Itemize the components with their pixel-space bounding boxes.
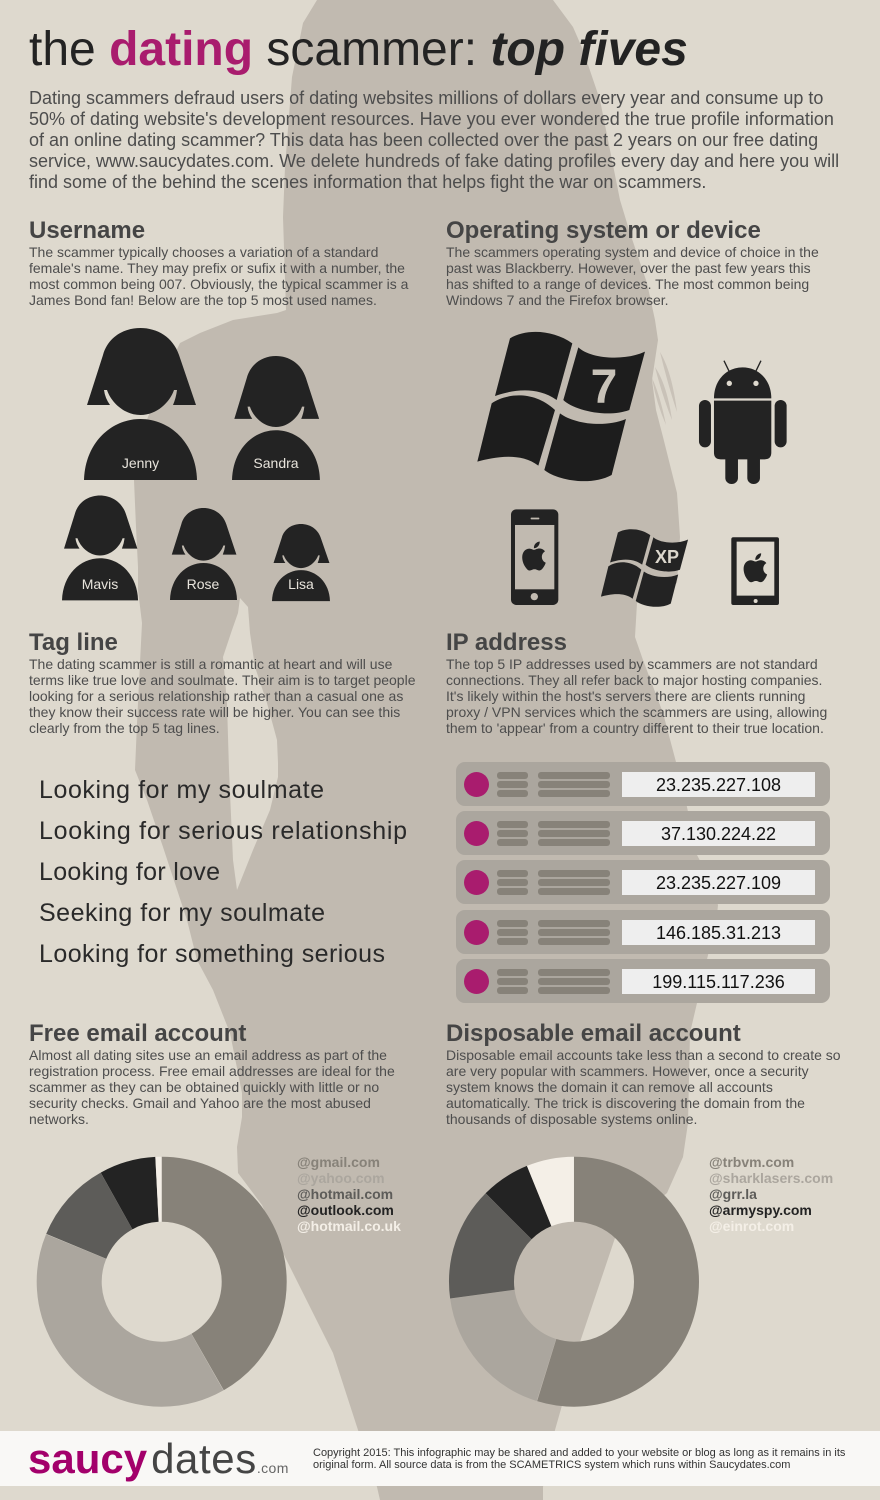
legend: disposable email: @trbvm.com <box>709 1154 794 1170</box>
heading: free email: Free email account <box>29 1020 246 1047</box>
legend: disposable email: @armyspy.com <box>709 1202 812 1218</box>
tag lines: Seeking for my soulmate <box>39 899 325 927</box>
icon: person Lisa <box>272 524 330 601</box>
legend: free email: @hotmail.co.uk <box>297 1218 401 1234</box>
text: ip address: proxy / VPN services which the scammers are using, allowing <box>446 704 827 720</box>
text: tag line: The dating scammer is still a romantic at heart and will use <box>29 656 392 672</box>
intro text: 50% of dating website's development resources. Have you ever wondered the true profile information <box>29 109 834 129</box>
text: ip address: them to 'appear' from a country different to their true location. <box>446 720 824 736</box>
text: ip address: It's likely within the host's servers there are clients running <box>446 688 805 704</box>
panel: free email <box>29 1020 395 1127</box>
panel: username <box>29 217 408 308</box>
icon: iphone <box>511 509 558 605</box>
ip row 1 <box>456 762 830 806</box>
ip row 3 <box>456 860 830 904</box>
tag lines <box>39 776 407 968</box>
text: disposable email: thousands of disposable systems online. <box>446 1111 697 1127</box>
intro text <box>29 88 839 192</box>
icon: windows xp <box>601 529 688 607</box>
title: the dating scammer: top fives <box>29 23 688 76</box>
text: tag line <box>29 656 415 736</box>
text: free email: Almost all dating sites use an email address as part of the <box>29 1047 387 1063</box>
text: tag line: looking for a serious relationship rather than a casual one as <box>29 688 403 704</box>
tag lines: Looking for love <box>39 858 220 886</box>
text: ip address: The top 5 IP addresses used by scammers are not standard <box>446 656 818 672</box>
heading: operating system: Operating system or device <box>446 217 761 244</box>
icon: windows 7 <box>477 332 645 481</box>
ip row 5 <box>456 959 830 1003</box>
text: username <box>29 244 408 308</box>
text: tag line: they know their success rate will be higher. You can see this <box>29 704 400 720</box>
text: operating system: past was Blackberry. However, over the past few years this <box>446 260 811 276</box>
panel: tag line <box>29 629 415 736</box>
heading: tag line: Tag line <box>29 629 118 656</box>
intro text: Dating scammers defraud users of dating websites millions of dollars every year and consume up to <box>29 88 823 108</box>
intro text: of an online dating scammer? This data has been collected over the past 2 years on our free dating <box>29 130 818 150</box>
logo: saucydates.com <box>28 1435 289 1482</box>
text: username: female's name. They may prefix or sufix it with a number, the <box>29 260 405 276</box>
text: free email: networks. <box>29 1111 89 1127</box>
text: username: most common being 007. Obviously, the typical scammer is a <box>29 276 408 292</box>
icon: person Mavis: Mavis <box>82 576 118 592</box>
text: disposable email: system knows the domain it can remove all accounts <box>446 1079 773 1095</box>
panel: operating system <box>446 217 819 308</box>
text: username: The scammer typically chooses a variation of a standard <box>29 244 378 260</box>
legend: free email <box>297 1154 401 1234</box>
text: ip address <box>446 656 827 736</box>
copyright text: original form. All source data is from the SCAMETRICS system which runs within Saucydates.com <box>313 1459 790 1471</box>
donut chart: disposable email <box>443 1151 705 1413</box>
copyright text: Copyright 2015: This infographic may be shared and added to your website or blog as long as it remains in its <box>313 1447 845 1459</box>
heading: ip address: IP address <box>446 629 567 656</box>
intro text: find some of the behind the scenes information that helps fight the war on scammers. <box>29 172 706 192</box>
footer bar <box>0 1431 880 1486</box>
icon: person Sandra: Sandra <box>253 455 299 471</box>
ip row 5: 199.115.117.236 <box>652 972 785 992</box>
icon: person Sandra <box>232 356 320 480</box>
text: username: James Bond fan! Below are the top 5 most used names. <box>29 292 377 308</box>
text: disposable email: Disposable email accounts take less than a second to create so <box>446 1047 841 1063</box>
tag lines: Looking for something serious <box>39 940 385 968</box>
legend: free email: @outlook.com <box>297 1202 394 1218</box>
text: disposable email: are very popular with scammers. However, once a security <box>446 1063 809 1079</box>
ip row 2: 37.130.224.22 <box>661 824 776 844</box>
text: free email <box>29 1047 395 1127</box>
text: tag line: terms like true love and soulmate. Their aim is to target people <box>29 672 415 688</box>
text: disposable email: automatically. The trick is discovering the domain from the <box>446 1095 805 1111</box>
ip row 4: 146.185.31.213 <box>656 923 781 943</box>
legend: disposable email: @grr.la <box>709 1186 757 1202</box>
text: tag line: clearly from the top 5 tag lines. <box>29 720 220 736</box>
text: operating system: has shifted to a range of devices. The most common being <box>446 276 809 292</box>
icon: windows xp: XP <box>655 547 679 567</box>
icon: ipad <box>731 537 779 605</box>
legend: free email: @hotmail.com <box>297 1186 393 1202</box>
ip row 3: 23.235.227.109 <box>656 873 781 893</box>
text: free email: registration process. Free email addresses are ideal for the <box>29 1063 395 1079</box>
ip row 4 <box>456 910 830 954</box>
icon: person Mavis <box>62 496 138 600</box>
ip row 1: 23.235.227.108 <box>656 775 781 795</box>
panel: disposable email <box>446 1020 841 1127</box>
panel: ip address <box>446 629 827 736</box>
tag lines: Looking for serious relationship <box>39 817 407 845</box>
text: disposable email <box>446 1047 841 1127</box>
icon: person Lisa: Lisa <box>288 576 314 592</box>
legend: free email: @gmail.com <box>297 1154 380 1170</box>
legend: disposable email: @sharklasers.com <box>709 1170 833 1186</box>
legend: disposable email: @einrot.com <box>709 1218 794 1234</box>
icon: android <box>699 361 787 484</box>
text: ip address: connections. They all refer back to major hosting companies. <box>446 672 822 688</box>
copyright text <box>313 1447 845 1471</box>
text: operating system: The scammers operating system and device of choice in the <box>446 244 819 260</box>
text: free email: scammer as they can be obtained quickly with little or no <box>29 1079 379 1095</box>
icon: person Rose <box>170 508 237 600</box>
intro text: service, www.saucydates.com. We delete hundreds of fake dating profiles every day and here you will <box>29 151 839 171</box>
ip row 2 <box>456 811 830 855</box>
donut chart: free email <box>36 1156 288 1408</box>
heading: username: Username <box>29 217 145 244</box>
heading: disposable email: Disposable email account <box>446 1020 741 1047</box>
icon: person Jenny: Jenny <box>122 455 159 471</box>
icon: person Jenny <box>84 328 197 480</box>
legend: free email: @yahoo.com <box>297 1170 385 1186</box>
legend: disposable email <box>709 1154 833 1234</box>
text: free email: security checks. Gmail and Yahoo are the most abused <box>29 1095 371 1111</box>
text: operating system: Windows 7 and the Firefox browser. <box>446 292 669 308</box>
icon: person Rose: Rose <box>187 576 220 592</box>
text: operating system <box>446 244 819 308</box>
icon: windows 7: 7 <box>591 361 617 414</box>
tag lines: Looking for my soulmate <box>39 776 324 804</box>
